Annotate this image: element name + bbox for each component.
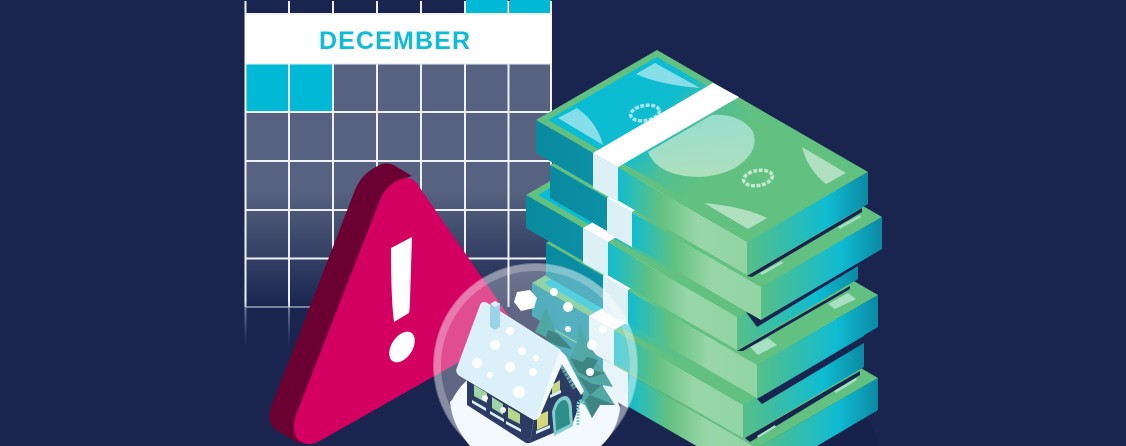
central circle bbox=[648, 115, 755, 177]
roof edge bbox=[536, 350, 584, 420]
highlighted date cells bbox=[246, 0, 551, 111]
glass bbox=[433, 263, 638, 446]
snow flakes bbox=[472, 288, 607, 413]
stack of money bbox=[526, 50, 882, 446]
door panel bbox=[555, 400, 570, 431]
bundle D bbox=[546, 173, 878, 398]
window sills bbox=[472, 390, 561, 434]
snow base bbox=[450, 378, 620, 446]
candy cane bbox=[578, 401, 583, 425]
floor shadow bbox=[630, 395, 880, 446]
banknote decorations bbox=[558, 63, 846, 229]
door bbox=[552, 396, 573, 436]
triangle side bbox=[269, 163, 412, 444]
bundle F bbox=[546, 256, 878, 446]
chimney bbox=[490, 301, 500, 330]
calendar bbox=[243, 0, 554, 348]
corner shapes bbox=[558, 63, 846, 229]
roof bbox=[457, 302, 560, 420]
grid lines bbox=[246, 1, 551, 345]
bundle E slit bbox=[757, 336, 864, 404]
back tree bbox=[535, 307, 572, 349]
bundle B slit and ticks bbox=[747, 208, 862, 277]
grid line fade bbox=[243, 300, 554, 348]
warning triangle bbox=[269, 163, 513, 444]
bundle B bbox=[550, 95, 882, 320]
triangle front bbox=[294, 178, 513, 444]
bundle D slit and ticks bbox=[737, 286, 856, 355]
calendar grid cells bbox=[245, 63, 552, 307]
grid fade bbox=[245, 190, 552, 308]
front tree bbox=[570, 322, 615, 418]
rosettes bbox=[629, 103, 774, 188]
left wall bbox=[467, 378, 534, 443]
bundle A top bbox=[536, 50, 868, 275]
bundle C bbox=[526, 125, 858, 350]
snow globe bbox=[433, 263, 638, 446]
bundle F slit and ticks bbox=[745, 371, 860, 442]
gable trim bbox=[562, 366, 575, 388]
exclamation mark bbox=[384, 237, 420, 367]
month title: DECEMBER bbox=[319, 27, 470, 55]
bundle E bbox=[532, 213, 864, 438]
gable wall bbox=[530, 365, 583, 443]
bundle C slit bbox=[746, 262, 858, 327]
wall windows bbox=[474, 380, 560, 430]
glass rim bbox=[434, 264, 637, 446]
house bbox=[457, 301, 584, 443]
month header bbox=[245, 15, 552, 63]
